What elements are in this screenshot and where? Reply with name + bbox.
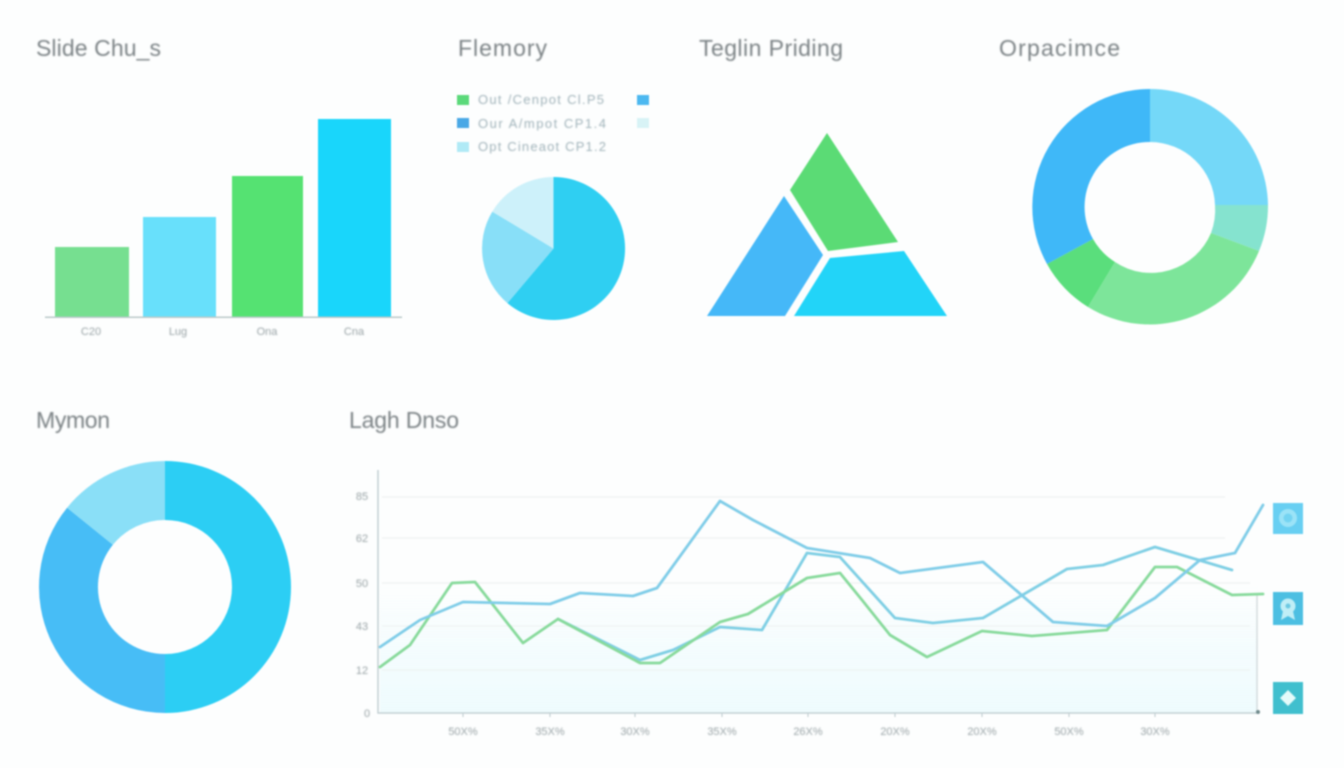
grid lines and axes [378,470,1260,717]
panel: pie chart [457,35,649,320]
legend [457,92,649,154]
bar labels: Ona [257,326,278,338]
y axis labels: 43 [356,621,368,633]
bar labels [81,326,365,338]
series: green line [380,567,1263,667]
triangle chart [707,133,947,316]
x axis labels: 30X% [620,726,650,738]
x axis labels [448,726,1170,738]
panel: line chart [349,407,1303,738]
pie chart [482,177,625,320]
heading: line chart: Lagh Dnso [349,407,459,433]
heading: triangle: Teglin Priding [699,35,843,61]
x axis labels: 50X% [448,726,478,738]
bar labels: Lug [169,326,187,338]
heading: bar chart: Slide Chu_s [36,35,161,61]
panel: bar chart [36,35,402,338]
x axis labels: 26X% [793,726,823,738]
heading: top donut: Orpacimce [999,35,1120,61]
series: blue line one [380,501,1263,647]
panel: bottom donut [36,407,291,713]
bar labels: Cna [344,326,365,338]
y axis labels: 50 [356,578,368,590]
donut chart [39,461,291,713]
panel: top donut [999,35,1268,324]
legend: Our A/mpot CP1.4 [478,116,606,131]
y axis labels: 0 [364,708,370,720]
y axis labels: 62 [356,533,368,545]
donut chart [1032,89,1268,324]
y axis labels [356,491,370,720]
series: blue line two [558,547,1232,660]
icon: middle badge [1273,592,1303,625]
bar labels: C20 [81,326,101,338]
icon: bottom badge [1273,682,1303,714]
y axis labels: 12 [356,665,368,677]
x axis labels: 20X% [967,726,997,738]
x axis labels: 50X% [1054,726,1084,738]
heading: bottom donut: Mymon [36,407,110,433]
area fill [380,585,1258,713]
panel: segmented triangle [699,35,947,316]
x axis labels: 20X% [880,726,910,738]
x axis labels: 35X% [535,726,565,738]
y axis labels: 85 [356,491,368,503]
x axis labels: 30X% [1140,726,1170,738]
legend: Opt Cineaot CP1.2 [478,139,606,154]
icon: top badge [1273,503,1303,534]
heading: pie chart: Flemory [458,35,548,61]
x axis labels: 35X% [707,726,737,738]
bar chart [45,119,402,318]
legend: Out /Cenpot Cl.P5 [478,92,604,107]
